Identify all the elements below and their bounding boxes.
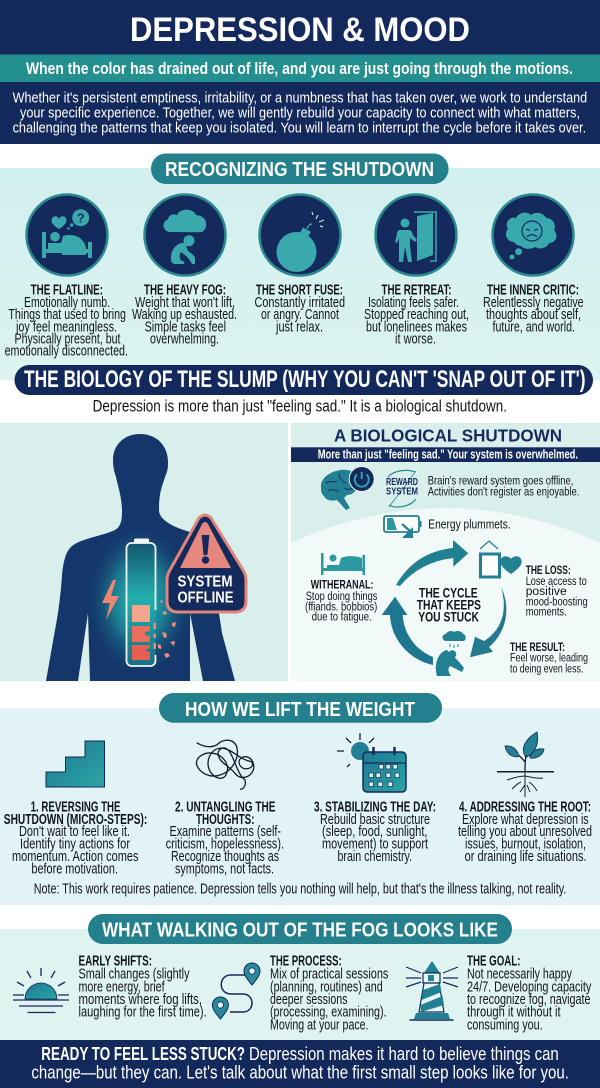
text: the flatline: joy feel meaningless.	[15, 320, 117, 336]
lightning bolt	[102, 580, 119, 620]
text: the goal: consuming you.	[467, 1017, 543, 1033]
text: step 2: criticism, hopelessness).	[166, 837, 284, 853]
text: the retreat: Isolating feels safer.	[368, 295, 459, 311]
text: the short fuse: THE SHORT FUSE:	[256, 282, 343, 298]
text: the retreat: Stopped reaching out,	[364, 307, 469, 323]
text: early shifts: more energy, brief	[78, 979, 165, 995]
heading: what walking out of the fog looks like: WHAT WALKING OUT OF THE FOG LOOKS LIKE	[102, 919, 498, 942]
text: the retreat	[364, 282, 469, 348]
heading: how we lift the weight: HOW WE LIFT THE WEIGHT	[185, 698, 415, 721]
text: witheranal	[305, 577, 377, 624]
icon: brain with power button	[321, 466, 374, 510]
text: the inner critic: future, and world.	[492, 320, 575, 336]
icon: low battery	[384, 516, 422, 538]
text: the retreat: but lonelinees makes	[366, 320, 467, 336]
text: step 1: momentum. Action comes	[12, 849, 138, 865]
text: the goal: through it without it	[467, 1005, 561, 1021]
heading: recognizing the shutdown	[151, 154, 448, 184]
text: reward system	[428, 473, 579, 498]
icon: person under rain cloud	[436, 631, 466, 676]
text: early shifts: moments where fog lifts,	[78, 992, 202, 1008]
text: the process: (processing, examining).	[270, 1005, 386, 1021]
text: the flatline	[5, 282, 128, 360]
arm gaps	[78, 613, 90, 681]
text: step 1: 1. REVERSING THE	[31, 800, 121, 816]
text: the flatline: Physically present, but	[14, 332, 121, 348]
icon: the inner critic	[492, 194, 574, 276]
text: the heavy fog: Weight that won't lift,	[135, 295, 235, 311]
text: step 3: brain chemistry.	[338, 849, 412, 865]
text: the short fuse	[254, 282, 345, 336]
text: the result	[510, 640, 588, 675]
icon: sun and calendar	[337, 733, 406, 792]
text: witheranal: WITHERANAL:	[311, 577, 373, 591]
silhouette	[46, 434, 235, 681]
icon: bed	[321, 553, 365, 575]
header panel	[0, 0, 600, 144]
icon: tangled thoughts	[196, 740, 254, 789]
warning sign	[167, 515, 246, 612]
icon: reward system	[386, 470, 418, 507]
icon: route with map pins	[212, 963, 260, 1019]
text: step 3: 3. STABILIZING THE DAY:	[314, 800, 436, 816]
text: step 2: THOUGHTS:	[196, 812, 254, 828]
text: energy plummets: Energy plummets.	[428, 516, 511, 531]
text: the process: deeper sessions	[270, 992, 348, 1008]
glow	[84, 522, 196, 678]
text: the heavy fog: Waking up eshausted.	[132, 307, 237, 323]
text: witheranal: Stop doing things	[306, 589, 377, 603]
footer call to action	[0, 1040, 600, 1088]
icon: the short fuse	[260, 194, 340, 276]
text: the loss	[526, 563, 588, 619]
text: the goal: THE GOAL:	[467, 954, 520, 970]
text: step 1: Identify tiny actions for	[20, 837, 130, 853]
cycle arrows	[382, 540, 506, 665]
panel title: A BIOLOGICAL SHUTDOWN	[334, 426, 562, 446]
text: the process	[270, 954, 388, 1033]
text: the short fuse: Constantly irritated	[254, 295, 345, 311]
text: the inner critic	[483, 282, 584, 336]
text: the goal	[467, 954, 592, 1033]
text: step 3	[314, 800, 436, 865]
icon: stairs	[46, 741, 104, 787]
text: the process: Moving at your pace.	[270, 1017, 368, 1033]
text: the loss: positive	[526, 584, 567, 598]
text: step 2: 2. UNTANGLING THE	[175, 800, 276, 816]
icon: reward system: REWARD	[386, 477, 418, 488]
subheading: Depression is more than just "feeling sad." It is a biological shutdown.	[93, 398, 507, 416]
icon: reward system: SYSTEM	[386, 486, 418, 497]
text: step 2: symptoms, not facts.	[175, 861, 274, 877]
text: the heavy fog	[132, 282, 237, 348]
text: early shifts: laughing for the first time).	[78, 1005, 207, 1021]
text: step 1: before motivation.	[31, 861, 118, 877]
warning sign: OFFLINE	[178, 590, 234, 607]
text: witheranal: (ffiands. bobbios)	[305, 599, 377, 613]
text: early shifts	[78, 954, 207, 1021]
text: witheranal: due to fatigue.	[312, 610, 372, 624]
intro paragraph	[13, 91, 587, 136]
heading: recognizing the shutdown: RECOGNIZING THE SHUTDOWN	[165, 158, 434, 181]
footer call to action: READY TO FEEL LESS STUCK?	[41, 1044, 245, 1064]
text: the process: (planning, routines) and	[270, 979, 383, 995]
icon: the flatline: ?	[77, 210, 85, 226]
text: the flatline: Things that used to bring	[8, 307, 126, 323]
text: step 4	[458, 800, 592, 865]
text: the process: Mix of practical sessions	[270, 967, 388, 983]
icon: plant with roots	[497, 732, 554, 797]
icon: lighthouse	[406, 961, 458, 1020]
icon: the flatline	[26, 194, 108, 276]
text: step 3: Rebuild basic structure	[320, 812, 430, 828]
title: DEPRESSION & MOOD	[130, 11, 470, 49]
text: the loss: THE LOSS:	[526, 563, 571, 577]
icon: the retreat	[376, 194, 456, 276]
text: the process: THE PROCESS:	[270, 954, 342, 970]
text: early shifts: EARLY SHIFTS:	[78, 954, 152, 970]
text: cycle label: THE CYCLE	[419, 585, 478, 600]
text: the result: THE RESULT:	[510, 640, 565, 654]
text: cycle label: THAT KEEPS	[417, 597, 481, 612]
text: the flatline: Emotionally numb.	[24, 295, 110, 311]
text: step 2: Recognize thoughts as	[171, 849, 279, 865]
text: step 1: Don't wait to feel like it.	[19, 824, 130, 840]
text: the loss: moments.	[526, 605, 567, 619]
heading: how we lift the weight	[159, 693, 442, 723]
icon: the heavy fog	[144, 194, 226, 276]
text: the heavy fog: overwhelming.	[150, 332, 219, 348]
icon: sunrise	[13, 968, 69, 1012]
text: early shifts: Small changes (slightly	[78, 967, 190, 983]
warning sign: SYSTEM	[178, 574, 232, 591]
debris	[154, 600, 176, 658]
heading: what walking out of the fog looks like	[88, 914, 512, 944]
text: cycle label: YOU STUCK	[418, 609, 479, 624]
text: step 2: Examine patterns (self-	[170, 824, 281, 840]
text: the heavy fog: THE HEAVY FOG:	[144, 282, 226, 298]
icon: picture frame and heart	[480, 541, 522, 577]
text: step 1	[4, 800, 147, 877]
text: the retreat: THE RETREAT:	[382, 282, 452, 298]
battery	[126, 538, 156, 666]
text: the flatline: emotionally disconnected.	[5, 344, 128, 360]
text: the heavy fog: Simple tasks feel	[145, 320, 226, 336]
text: step 3: movement) to support	[322, 837, 428, 853]
panel: a biological shutdown	[291, 423, 600, 681]
text: step 1: SHUTDOWN (MICRO-STEPS):	[4, 812, 147, 828]
panel: system offline illustration	[0, 423, 288, 681]
text: step 3: (sleep, food, sunlight,	[322, 824, 428, 840]
tagline band	[0, 54, 600, 82]
text: the short fuse: just relax.	[275, 320, 323, 336]
text: the retreat: it worse.	[395, 332, 436, 348]
text: step 2	[166, 800, 284, 877]
text: cycle label	[417, 585, 481, 624]
text: the short fuse: or angry. Cannot	[261, 307, 339, 323]
text: the flatline: THE FLATLINE:	[31, 282, 103, 298]
